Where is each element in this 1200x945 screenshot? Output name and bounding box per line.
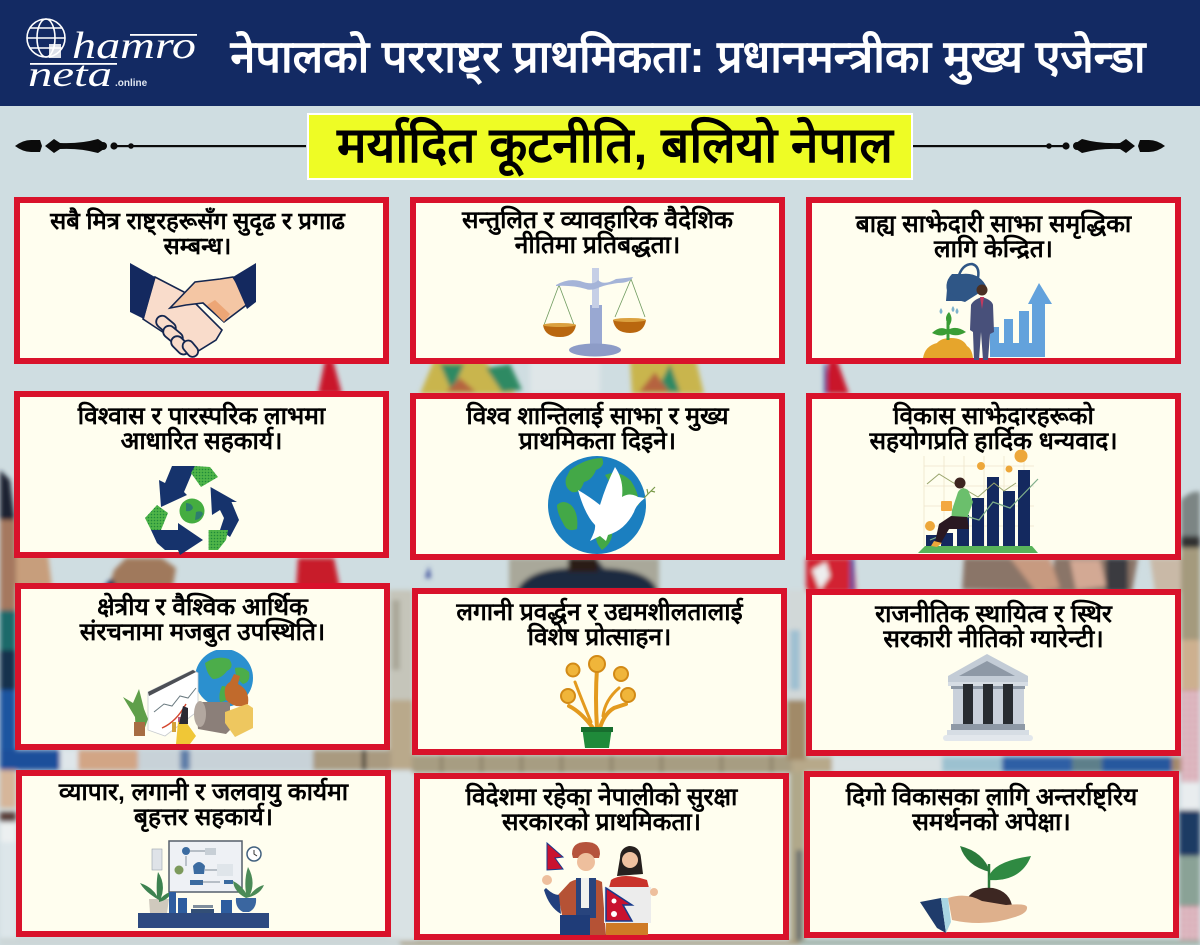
heading — [50, 207, 346, 260]
heading: संरचनामा मजबुत उपस्थिति। — [80, 618, 325, 646]
heading — [874, 600, 1113, 652]
panel: world peace — [410, 393, 785, 560]
panel: political stability — [806, 589, 1181, 756]
panel: regional and global economy — [15, 583, 390, 750]
panel: external partnership — [806, 197, 1181, 364]
heading: आधारित सहकार्य। — [121, 428, 282, 454]
banner heading: मर्यादित कूटनीति, बलियो नेपाल — [337, 118, 893, 173]
logo: .online — [115, 78, 148, 89]
icon: government building — [943, 654, 1033, 741]
heading: विदेशमा रहेका नेपालीको सुरक्षा — [466, 784, 737, 811]
panel: sustainable development — [804, 771, 1179, 938]
panel: thanks to partners — [806, 393, 1181, 560]
heading: विकास साझेदारहरूको — [893, 403, 1094, 430]
title: नेपालको परराष्ट्र प्राथमिकता: प्रधानमन्त्रीका मुख्य एजेन्डा — [230, 31, 1146, 82]
heading: क्षेत्रीय र वैश्विक आर्थिक — [97, 594, 308, 621]
heading: सबै मित्र राष्ट्रहरूसँग सुदृढ र प्रगाढ — [50, 208, 345, 235]
heading: नीतिमा प्रतिबद्धता। — [515, 232, 680, 258]
heading: प्राथमिकता दिइने। — [519, 428, 676, 454]
panel: friendly nations — [14, 197, 389, 364]
heading — [456, 598, 744, 650]
panel: trade and climate — [16, 770, 391, 937]
heading — [855, 210, 1132, 262]
heading — [869, 402, 1118, 454]
heading: सम्बन्ध। — [164, 232, 231, 260]
header bar — [0, 0, 1200, 106]
heading: राजनीतिक स्थायित्व र स्थिर — [875, 601, 1112, 628]
icon: watering plant and growth chart — [923, 262, 1052, 360]
icon: Nepali couple with flag — [542, 842, 658, 935]
logo — [26, 18, 197, 94]
heading: बाह्य साझेदारी साझा समृद्धिका — [856, 211, 1131, 238]
panel: trust and mutual benefit — [14, 391, 389, 558]
logo: neta — [28, 54, 112, 94]
heading: सहयोगप्रति हार्दिक धन्यवाद। — [869, 428, 1118, 454]
heading: व्यापार, लगानी र जलवायु कार्यमा — [59, 779, 348, 806]
heading — [462, 206, 734, 258]
ornament: left divider — [15, 139, 306, 153]
icon: handshake — [130, 263, 256, 358]
heading: दिगो विकासका लागि अन्तर्राष्ट्रिय — [846, 784, 1137, 811]
icon: person on bar chart — [918, 450, 1038, 553]
icon: whiteboard and desk — [138, 840, 269, 928]
icon: globe, chart board and barrel — [123, 650, 253, 744]
heading: समर्थनको अपेक्षा। — [912, 808, 1071, 836]
heading — [58, 778, 349, 832]
heading: सरकारी नीतिको ग्यारेन्टी। — [883, 626, 1104, 652]
ornament: right divider — [913, 139, 1165, 153]
heading: सरकारको प्राथमिकता। — [502, 808, 701, 836]
heading: लागि केन्द्रित। — [934, 236, 1053, 262]
heading: लगानी प्रवर्द्धन र उद्यमशीलतालाई — [456, 599, 743, 626]
heading: बृहत्तर सहकार्य। — [134, 804, 273, 830]
heading: सन्तुलित र व्यावहारिक वैदेशिक — [462, 207, 733, 234]
logo: hamro — [72, 25, 196, 67]
icon: balance scales — [543, 268, 646, 356]
icon: recycle arrows — [145, 466, 239, 555]
heading — [79, 592, 325, 647]
heading — [845, 782, 1138, 836]
heading: विश्वास र पारस्परिक लाभमा — [78, 403, 325, 430]
icon: hand holding sapling — [920, 846, 1031, 933]
panel: safety of Nepalis abroad — [414, 773, 789, 940]
heading — [466, 402, 730, 454]
panel: balanced policy — [410, 197, 785, 364]
heading: विशेष प्रोत्साहन। — [528, 624, 671, 650]
icon: globe and dove — [548, 456, 656, 554]
panel: investment promotion — [412, 588, 787, 755]
heading — [465, 782, 738, 836]
icon: coin tree — [560, 655, 636, 748]
heading — [77, 402, 326, 454]
heading: विश्व शान्तिलाई साझा र मुख्य — [466, 403, 729, 430]
